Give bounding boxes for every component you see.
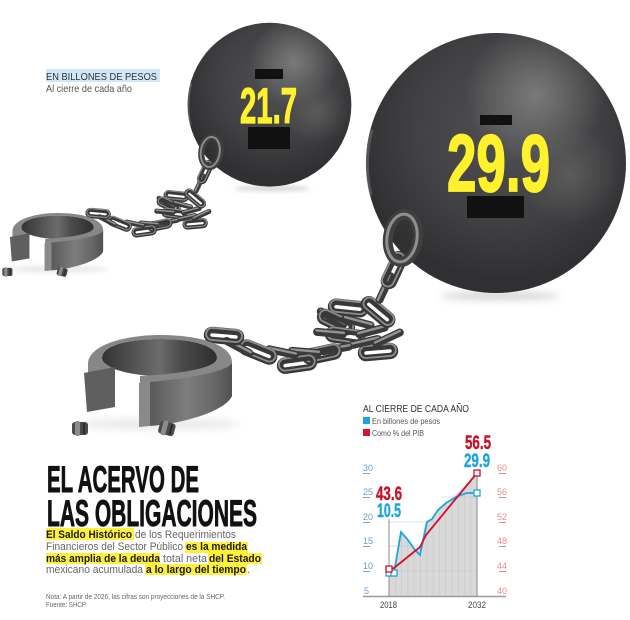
- description text: del Estado: [209, 553, 261, 565]
- blue series: [389, 493, 477, 573]
- value callouts: 10.5: [377, 501, 401, 522]
- description text: total neta: [163, 553, 208, 565]
- left axis: 30: [363, 463, 373, 473]
- small ball, chain and shackle: [2, 23, 351, 278]
- small ball labels: 21.7: [240, 78, 297, 134]
- chart heading and legend: Como % del PIB: [372, 429, 424, 438]
- source note: Fuente: SHCP.: [46, 600, 87, 609]
- right axis: 60: [497, 463, 507, 473]
- value callouts: 56.5: [465, 433, 491, 454]
- right axis: 40: [497, 586, 507, 596]
- description text: .: [247, 564, 250, 576]
- red series: [389, 473, 477, 569]
- year labels: 2032: [468, 600, 486, 610]
- shaded area: [389, 473, 477, 596]
- right axis: 48: [497, 536, 507, 546]
- year labels: 2018: [380, 600, 397, 610]
- description text: más amplia de la deuda: [46, 553, 161, 565]
- value callouts: 43.6: [376, 484, 402, 505]
- description text: mexicano acumulada: [46, 564, 144, 576]
- unit heading: [46, 69, 160, 95]
- unit heading: EN BILLONES DE PESOS: [46, 71, 157, 83]
- year labels: [380, 600, 486, 610]
- right axis: 44: [497, 561, 507, 571]
- left axis: 25: [363, 487, 373, 497]
- markers: [386, 470, 480, 576]
- title: LAS OBLIGACIONES: [47, 493, 257, 534]
- description text: [46, 528, 262, 576]
- large ball, chain and shackle: [72, 33, 626, 438]
- right axis: 52: [497, 512, 507, 522]
- description text: es la medida: [186, 541, 248, 553]
- chart heading and legend: En billones de pesos: [372, 417, 440, 426]
- value callouts: [376, 433, 491, 522]
- right axis: 56: [497, 487, 507, 497]
- value callouts: 29.9: [464, 451, 490, 472]
- small ball labels: [240, 69, 297, 149]
- source note: [46, 592, 225, 609]
- left axis: 15: [363, 536, 373, 546]
- large ball labels: 29.9: [447, 119, 550, 209]
- left axis: 20: [363, 512, 373, 522]
- title: EL ACERVO DE: [47, 459, 199, 500]
- description text: a lo largo del tiempo: [146, 564, 246, 576]
- unit heading: Al cierre de cada año: [46, 83, 132, 95]
- left axis: 5: [364, 586, 369, 596]
- title: [47, 459, 257, 534]
- line chart: [363, 433, 507, 610]
- description text: Financieros del Sector Público: [46, 541, 183, 553]
- chart heading and legend: AL CIERRE DE CADA AÑO: [363, 402, 469, 415]
- description text: de los Requerimientos: [135, 529, 236, 541]
- left axis: 10: [363, 561, 373, 571]
- left axis: [363, 463, 373, 596]
- right axis: [497, 463, 507, 596]
- chart heading and legend: [363, 402, 469, 438]
- large ball labels: [447, 115, 550, 218]
- source note: Nota: A partir de 2026, las cifras son proyecciones de la SHCP.: [46, 592, 225, 601]
- description text: El Saldo Histórico: [46, 529, 132, 541]
